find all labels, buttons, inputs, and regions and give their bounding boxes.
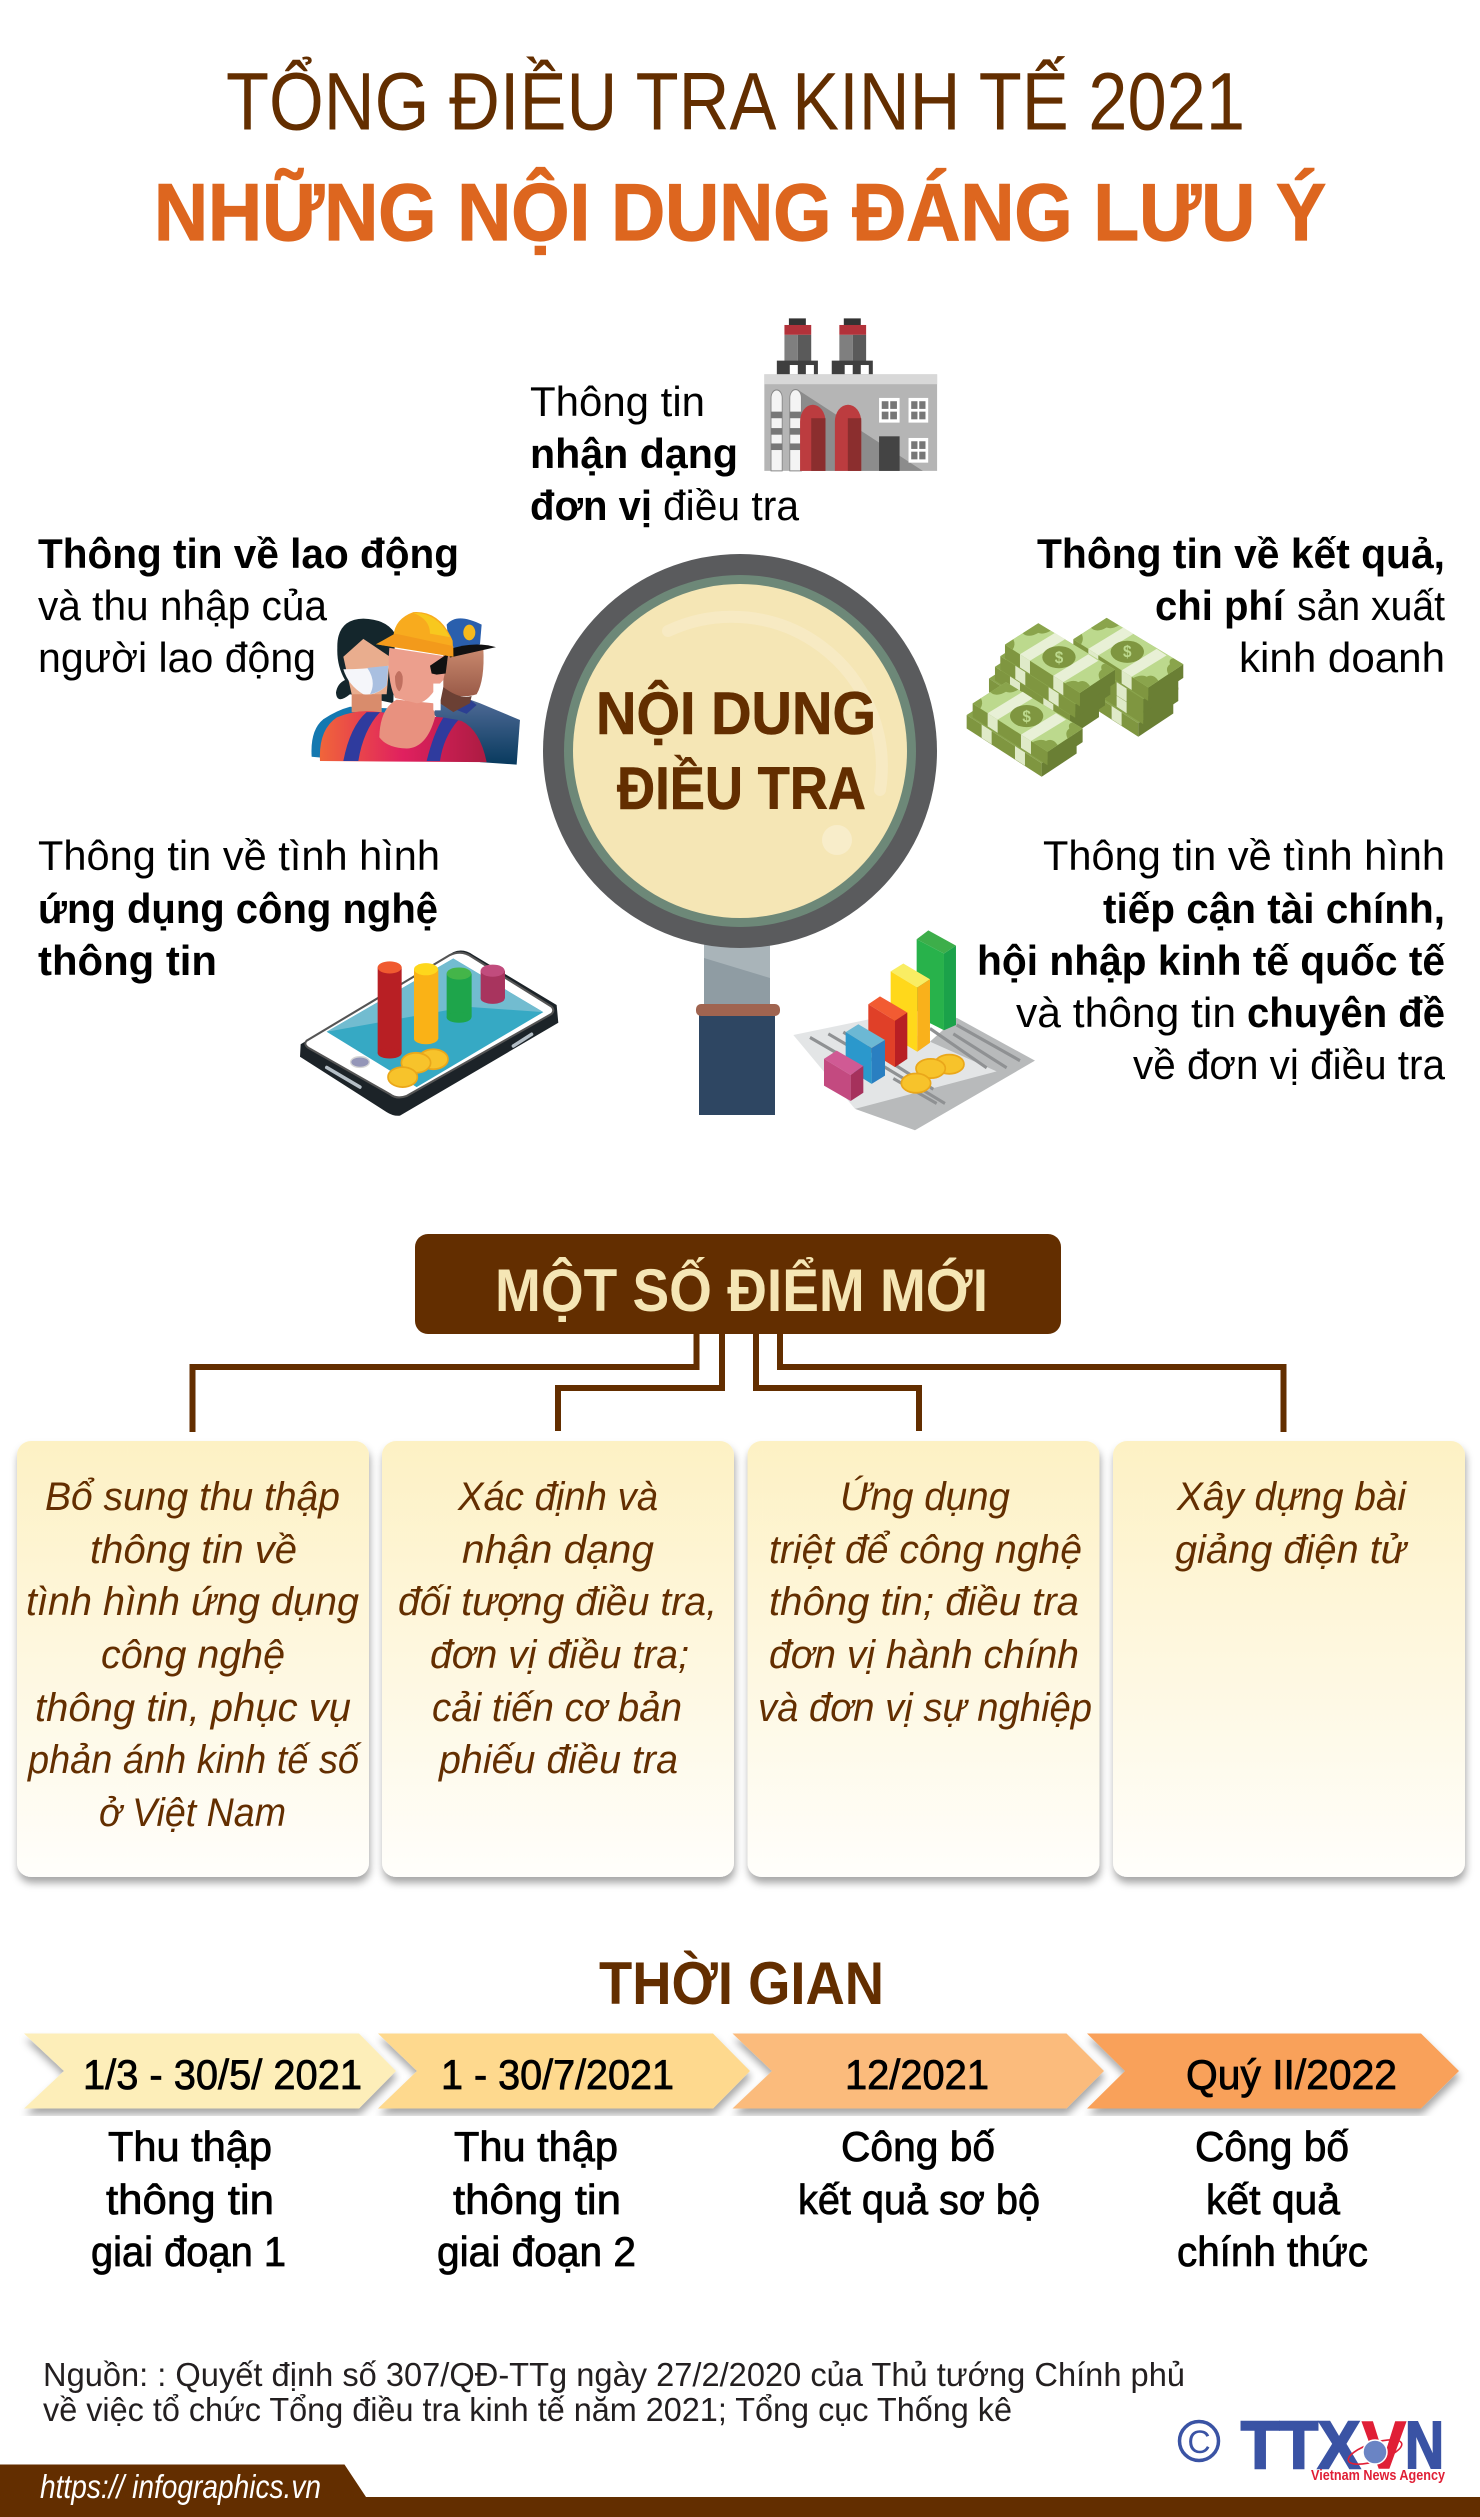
text: tiếp cận tài chính, hội nhập: và thông tin: [1016, 989, 1236, 1036]
icon: money: [967, 618, 1183, 777]
lens text: NỘI DUNG: [596, 680, 876, 747]
card 1: thông tin, phục vụ: [35, 1686, 351, 1730]
card 3: triệt để công nghệ: [769, 1528, 1082, 1572]
icon: money: $: [1022, 708, 1031, 726]
text: thông tin về lao động: [38, 530, 459, 681]
timeline step 1: [24, 2034, 396, 2108]
card 1: công nghệ: [101, 1633, 285, 1677]
text: ứng dụng công nghệ thông tin: Thông tin về tình hình: [38, 832, 440, 879]
text: thông tin về lao động: và thu nhập của: [38, 582, 328, 629]
card 3: [748, 1441, 1100, 1877]
text: tiếp cận tài chính, hội nhập: hội nhập kinh tế quốc tế: [977, 937, 1446, 984]
card 1: ở Việt Nam: [99, 1791, 286, 1835]
source note: [43, 2356, 1185, 2428]
icon: smartphone with chart: [300, 950, 558, 1116]
card 4: [1113, 1441, 1465, 1877]
card 1: tình hình ứng dụng: [26, 1580, 359, 1624]
card 3: đơn vị hành chính: [769, 1633, 1079, 1677]
timeline step 2: [378, 2034, 750, 2108]
text: thông tin về kết quả: Thông tin về kết quả,: [1037, 530, 1445, 577]
text: tiếp cận tài chính, hội nhập: tiếp cận tài chính,: [1103, 885, 1445, 932]
step 4 description: chính thức: [1177, 2228, 1368, 2275]
logo: TTXVN: TTX: [1241, 2408, 1360, 2483]
text: thông tin về lao động: người lao động: [38, 634, 316, 681]
step 2 description: Thu thập: [454, 2123, 618, 2170]
card 1: [17, 1441, 369, 1877]
title line 1: TỔNG ĐIỀU TRA KINH TẾ 2021: [226, 56, 1245, 148]
lens text: [596, 680, 876, 822]
card 3: Ứng dụng: [840, 1474, 1010, 1519]
step 4 description: [1177, 2123, 1368, 2275]
text: thông tin về kết quả: sản xuất: [1297, 582, 1445, 629]
text: tiếp cận tài chính, hội nhập: về đơn vị điều tra: [1133, 1041, 1446, 1088]
text: ứng dụng công nghệ thông tin: ứng dụng công nghệ: [38, 885, 438, 932]
icon: bar chart on papers: [793, 930, 1035, 1130]
logo: TTXVN: [1180, 2408, 1446, 2484]
icon: money: $: [1055, 649, 1063, 667]
card 2: nhận dạng: [462, 1528, 654, 1572]
timeline step 4: [1087, 2034, 1459, 2108]
card 2: đơn vị điều tra;: [430, 1633, 689, 1677]
step 3 description: Công bố: [841, 2123, 995, 2170]
card 2: Xác định và: [457, 1475, 658, 1519]
card 1: phản ánh kinh tế số: [27, 1738, 363, 1782]
text: thông tin nhận dạng đơn vị: nhận dạng: [530, 430, 738, 477]
card 4: Xây dựng bài: [1176, 1475, 1407, 1519]
heading: một số điểm mới: [415, 1234, 1061, 1334]
card 4: giảng điện tử: [1175, 1528, 1409, 1572]
card 1: Bổ sung thu thập: [45, 1475, 340, 1519]
text: thông tin nhận dạng đơn vị: [530, 378, 800, 529]
text: thông tin về kết quả: kinh doanh: [1239, 634, 1445, 681]
card 2: [382, 1441, 734, 1877]
logo: TTXVN: C: [1187, 2424, 1211, 2460]
heading: một số điểm mới: MỘT SỐ ĐIỂM MỚI: [495, 1257, 988, 1324]
step 3 description: [798, 2123, 1040, 2223]
footer band: https:// infographics.vn: [40, 2468, 321, 2505]
step 2 description: thông tin: [453, 2176, 621, 2223]
logo: TTXVN: Vietnam News Agency: [1311, 2467, 1446, 2484]
timeline step 2: 1 - 30/7/2021: [441, 2051, 674, 2098]
timeline step 3: 12/2021: [845, 2051, 989, 2098]
handle: [696, 930, 780, 1115]
step 4 description: kết quả: [1206, 2176, 1341, 2223]
text: ứng dụng công nghệ thông tin: thông tin: [38, 937, 217, 984]
step 1 description: thông tin: [106, 2176, 274, 2223]
step 2 description: giai đoạn 2: [437, 2228, 636, 2275]
text: tiếp cận tài chính, hội nhập: [977, 832, 1446, 1088]
source note: về việc tổ chức Tổng điều tra kinh tế năm 2021; Tổng cục Thống kê: [43, 2391, 1012, 2428]
magnifying glass: [543, 554, 937, 1115]
text: thông tin về lao động: Thông tin về lao động: [38, 530, 459, 577]
card 3: và đơn vị sự nghiệp: [758, 1686, 1092, 1730]
connectors: [192, 1334, 1284, 1432]
logo: TTXVN: N: [1405, 2408, 1444, 2483]
lens text: ĐIỀU TRA: [617, 755, 866, 822]
step 1 description: [91, 2123, 286, 2275]
step 4 description: Công bố: [1195, 2123, 1349, 2170]
timeline step 4: Quý II/2022: [1186, 2051, 1397, 2098]
timeline step 1: 1/3 - 30/5/ 2021: [83, 2051, 362, 2098]
lens: [543, 554, 937, 948]
text: thông tin nhận dạng đơn vị: Thông tin: [530, 378, 705, 425]
card 2: phiếu điều tra: [438, 1738, 678, 1782]
card 2: cải tiến cơ bản: [432, 1686, 682, 1730]
icon: workers: [311, 612, 520, 765]
logo: TTXVN: V: [1362, 2408, 1406, 2483]
icon: money: $: [1123, 644, 1132, 661]
footer band: [0, 2464, 1480, 2517]
text: thông tin về kết quả: chi phí: [1155, 582, 1285, 629]
step 2 description: [437, 2123, 636, 2275]
text: thông tin nhận dạng đơn vị: đơn vị: [530, 482, 652, 529]
heading: thời gian: THỜI GIAN: [599, 1950, 884, 2017]
card 1: thông tin về: [90, 1528, 297, 1572]
text: tiếp cận tài chính, hội nhập: Thông tin về tình hình: [1043, 832, 1445, 879]
text: tiếp cận tài chính, hội nhập: chuyên đề: [1247, 989, 1445, 1036]
icon: factory: [764, 318, 937, 471]
text: ứng dụng công nghệ thông tin: [38, 832, 440, 984]
timeline step 3: [732, 2034, 1104, 2108]
card 3: thông tin; điều tra: [769, 1580, 1079, 1624]
card 2: đối tượng điều tra,: [398, 1580, 717, 1624]
text: thông tin về kết quả: [1037, 530, 1445, 681]
text: thông tin nhận dạng đơn vị: điều tra: [663, 482, 800, 529]
step 1 description: giai đoạn 1: [91, 2228, 286, 2275]
step 3 description: kết quả sơ bộ: [798, 2176, 1040, 2223]
title line 2: NHỮNG NỘI DUNG ĐÁNG LƯU Ý: [154, 167, 1326, 258]
step 1 description: Thu thập: [108, 2123, 272, 2170]
source note: Nguồn: : Quyết định số 307/QĐ-TTg ngày 27/2/2020 của Thủ tướng Chính phủ: [43, 2356, 1185, 2393]
